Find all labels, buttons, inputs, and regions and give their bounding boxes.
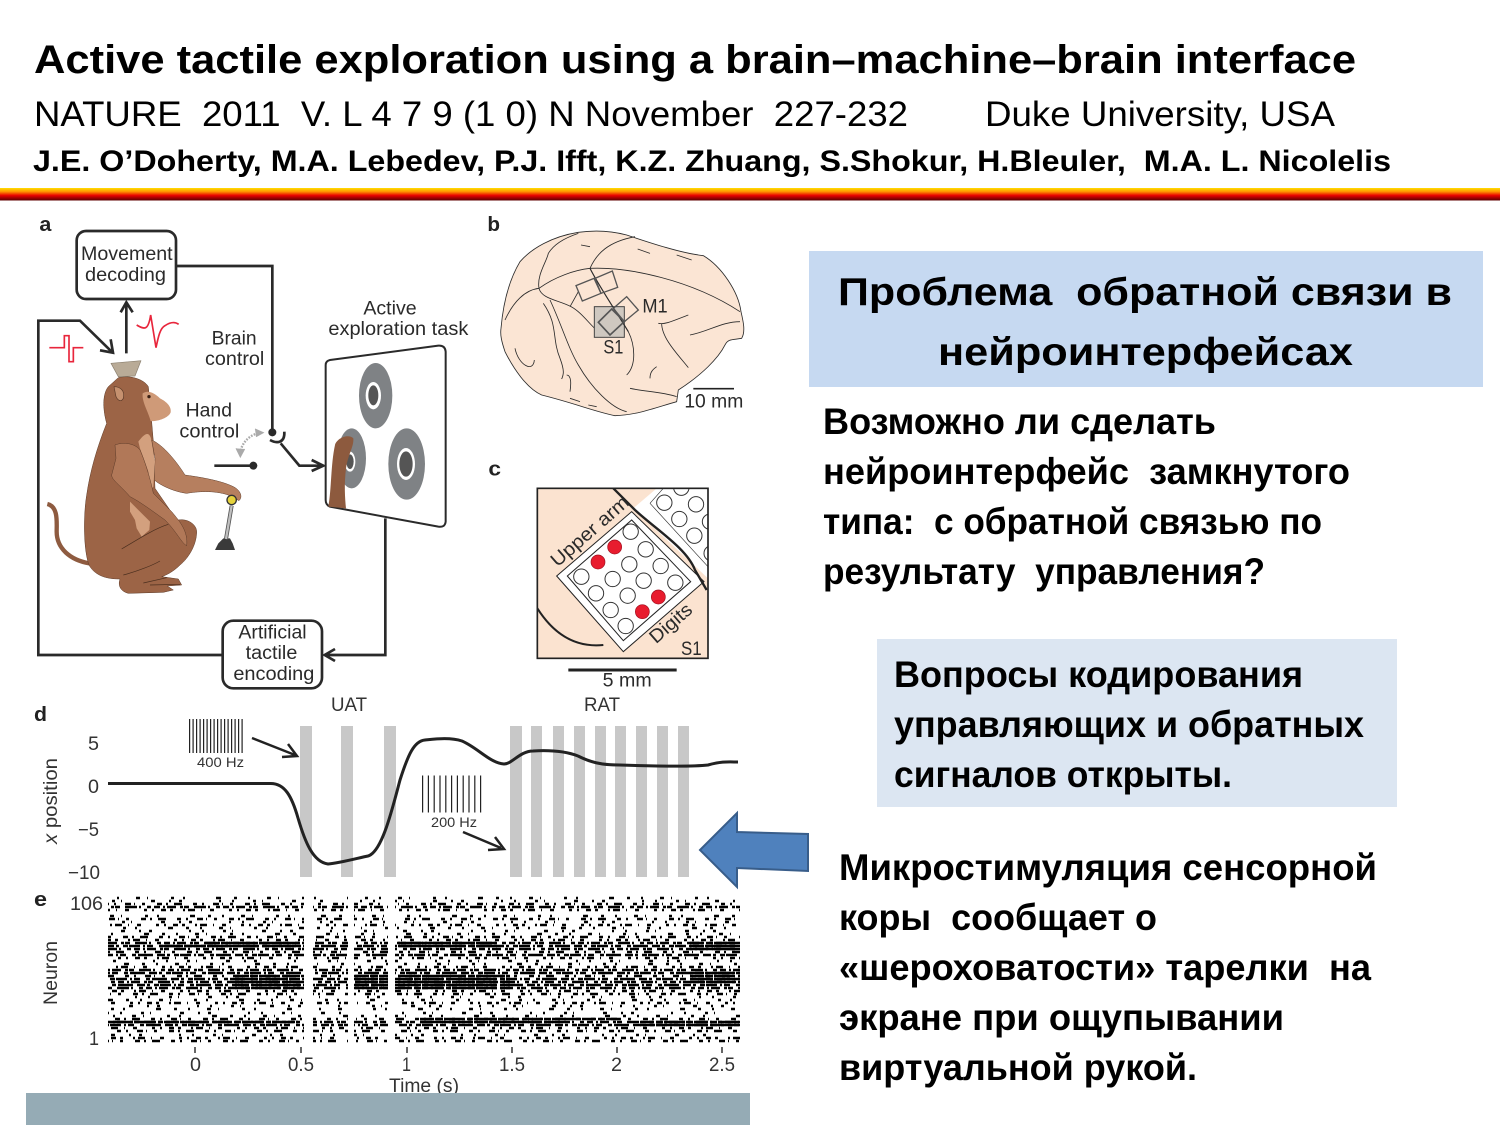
- callout: coding questions: [877, 639, 1397, 807]
- heading panel: feedback problem: нейроинтерфейсах: [938, 331, 1353, 374]
- labels: hand control: [179, 401, 239, 442]
- title: Active tactile exploration using a brain–machine–brain interface: [34, 38, 1356, 82]
- electrode arrays: [576, 271, 638, 335]
- arrow to UAT stripes: [252, 738, 297, 757]
- box: artificial tactile encoding: encoding: [233, 664, 314, 685]
- y axis tick labels: −5: [78, 820, 99, 841]
- authors line: J.E. O’Doherty, M.A. Lebedev, P.J. Ifft, K.Z. Zhuang, S.Shokur, H.Bleuler, M.A. L. Nicolelis: [33, 145, 1391, 178]
- text block: question: нейроинтерфейс замкнутого: [823, 451, 1350, 492]
- labels: brain control: Brain: [212, 328, 257, 349]
- labels: active exploration task: [328, 298, 469, 340]
- text block: question: [823, 401, 1350, 592]
- callout: coding questions: сигналов открыты.: [894, 754, 1232, 795]
- RAT label: RAT: [584, 695, 620, 716]
- neuron axis labels: 106: [70, 894, 103, 915]
- neuron axis labels: 1: [89, 1029, 99, 1050]
- label a: a: [39, 214, 52, 236]
- labels: hand control: control: [179, 421, 239, 442]
- gray S1 window: [594, 307, 624, 337]
- box: movement decoding: Movement: [81, 244, 173, 265]
- monkey and joystick: [47, 361, 241, 593]
- 200 Hz pulse train: [422, 794, 484, 830]
- central sulcus: [590, 268, 628, 332]
- box: movement decoding: [77, 231, 176, 299]
- callout: coding questions: Вопросы кодирования: [894, 654, 1303, 695]
- panel b: brain: [487, 214, 744, 692]
- labels: active exploration task: Active: [363, 298, 417, 319]
- scale bar 5 mm: 5 mm: [603, 671, 652, 692]
- labels: brain control: control: [205, 349, 264, 370]
- panel d: x position plot: [34, 695, 738, 884]
- y axis tick labels: [68, 734, 100, 884]
- electrodes stimulated red: [591, 540, 665, 619]
- box: artificial tactile encoding: tactile: [246, 643, 297, 664]
- heading panel: feedback problem: Проблема обратной связи в: [838, 271, 1452, 314]
- panel c: electrode array map: S1: [681, 639, 702, 660]
- scale bar 5 mm: [568, 670, 677, 692]
- labels: hand control: Hand: [186, 401, 232, 422]
- label b: b: [487, 214, 500, 236]
- connection lines: [38, 266, 385, 661]
- text block: microstimulation: экране при ощупывании: [839, 997, 1284, 1038]
- raster gaps at stimulation: [304, 895, 395, 1045]
- 400 Hz pulse train: 400 Hz: [197, 754, 244, 770]
- time axis: [190, 1047, 735, 1097]
- affiliation: Duke University, USA: [985, 95, 1336, 134]
- box: artificial tactile encoding: [223, 621, 322, 688]
- labels: active exploration task: exploration task: [328, 319, 469, 340]
- panel c: electrode array map: Upper arm: [547, 492, 634, 571]
- time axis: 0: [190, 1055, 201, 1076]
- time axis: 1.5: [499, 1055, 525, 1076]
- panel c: electrode array map: [537, 480, 719, 660]
- time axis: 0.5: [288, 1055, 314, 1076]
- time axis: 2.5: [709, 1055, 735, 1076]
- text block: microstimulation: Микростимуляция сенсорной: [839, 847, 1377, 888]
- labels: brain control: [205, 328, 264, 370]
- joystick: [215, 506, 235, 550]
- blue arrow: [700, 813, 808, 887]
- text block: microstimulation: виртуальной рукой.: [839, 1047, 1197, 1088]
- text block: question: Возможно ли сделать: [823, 401, 1216, 442]
- citation line: NATURE 2011 V. L 4 7 9 (1 0) N November 227-232: [34, 95, 908, 134]
- label e: e: [34, 889, 47, 911]
- text block: microstimulation: коры сообщает о: [839, 897, 1157, 938]
- heading panel: feedback problem: [809, 251, 1483, 387]
- position curve: [108, 739, 738, 864]
- brain sulci: [505, 233, 740, 412]
- 200 Hz pulse train: 200 Hz: [431, 814, 477, 830]
- screen with targets: [326, 346, 446, 527]
- box: artificial tactile encoding: Artificial: [238, 622, 307, 643]
- text block: question: результату управления?: [823, 551, 1265, 592]
- arrow to RAT stripes: [463, 832, 504, 850]
- time axis: 2: [611, 1055, 622, 1076]
- y axis tick labels: 5: [88, 734, 99, 755]
- UAT label: UAT: [331, 695, 367, 716]
- panel a: closed-loop diagram: [38, 214, 469, 688]
- 400 Hz pulse train: [189, 736, 245, 770]
- y axis label: x position: [41, 758, 62, 845]
- panel c: electrode array map: Digits: [646, 599, 697, 648]
- monkey: [47, 361, 241, 593]
- brain outline: [501, 231, 744, 416]
- bottom bar: [26, 1093, 750, 1125]
- time axis: Time (s): [389, 1076, 459, 1097]
- neuron axis labels: [41, 894, 103, 1050]
- label d: d: [34, 704, 47, 726]
- panel e: spike raster: [34, 889, 740, 1097]
- brain drawing: [501, 231, 744, 416]
- text block: microstimulation: «шероховатости» тарелки на: [839, 947, 1371, 988]
- y axis tick labels: −10: [68, 863, 100, 884]
- y axis tick labels: 0: [88, 777, 99, 798]
- text block: microstimulation: [839, 847, 1377, 1088]
- box: movement decoding: decoding: [85, 265, 166, 286]
- electrodes open: [573, 489, 708, 634]
- text block: question: типа: с обратной связью по: [823, 501, 1322, 542]
- red pulse waveform: [49, 336, 83, 362]
- label c: c: [488, 459, 501, 481]
- raster dense bursts: [110, 943, 740, 1025]
- raster rows: [108, 898, 740, 1041]
- time axis: 1: [402, 1055, 411, 1076]
- label M1: M1: [642, 296, 668, 317]
- red spike waveform: [137, 315, 179, 348]
- gradient divider bar: [0, 188, 1500, 200]
- stimulation stripes: [300, 726, 689, 877]
- scale bar 10 mm: 10 mm: [684, 392, 743, 413]
- neuron axis labels: Neuron: [41, 941, 62, 1005]
- label S1: S1: [603, 337, 623, 358]
- callout: coding questions: управляющих и обратных: [894, 704, 1364, 745]
